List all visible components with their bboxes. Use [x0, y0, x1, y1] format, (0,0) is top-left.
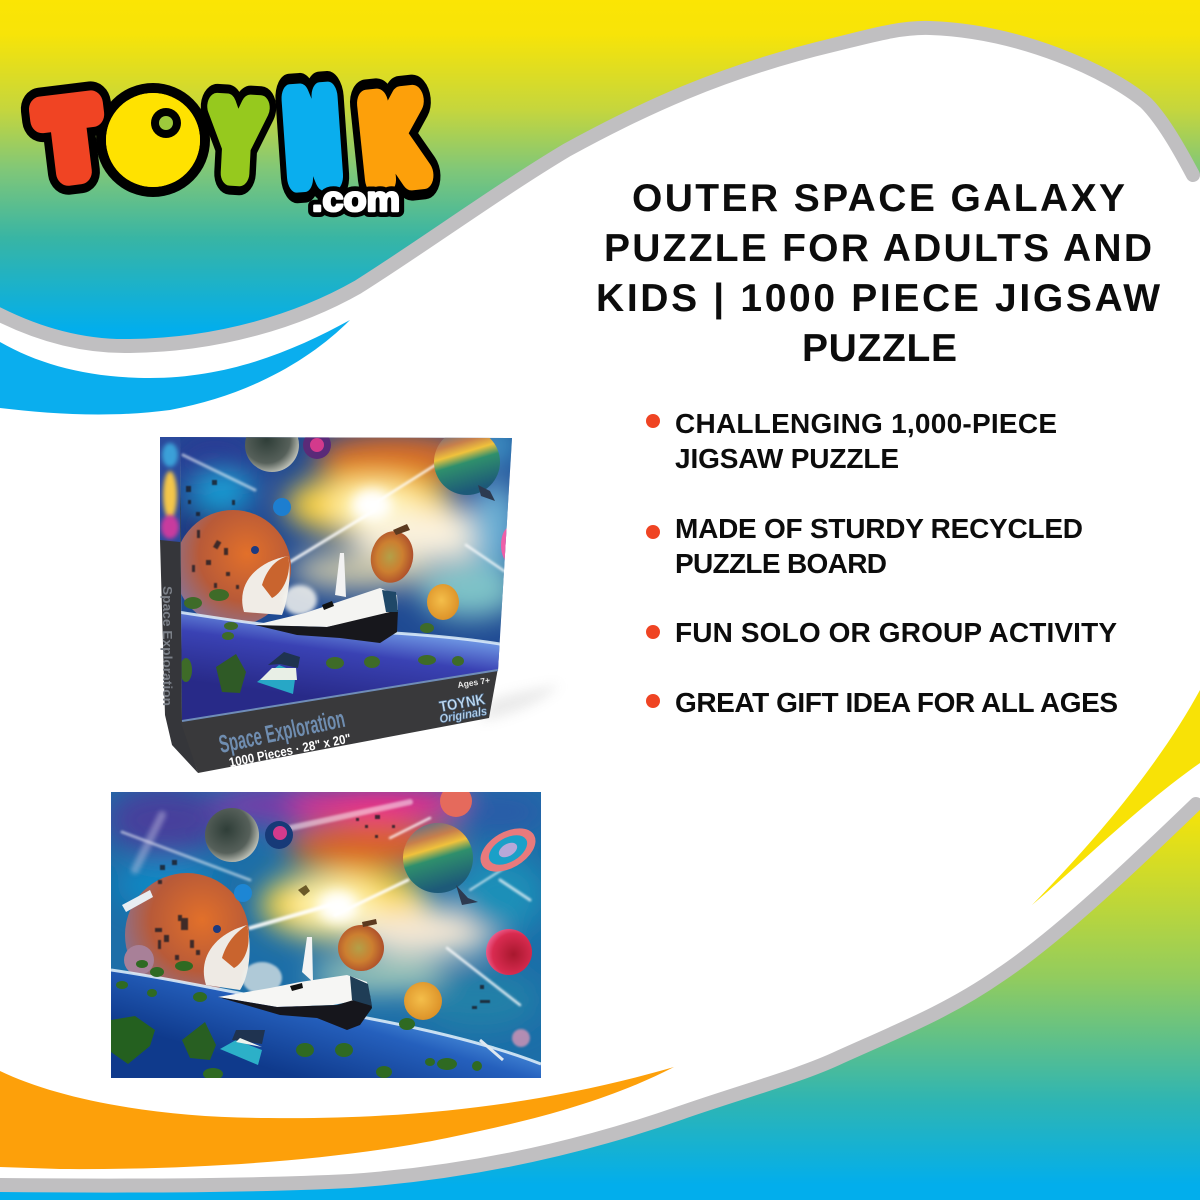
logo letter T: T: [37, 83, 103, 196]
logo letter O: [106, 93, 200, 191]
top grey swoosh band: [0, 28, 1193, 346]
bullet 1: CHALLENGING 1,000-PIECE: [675, 408, 1057, 439]
box brand: [436, 691, 488, 726]
top gradient background with swoosh: [0, 0, 1200, 346]
title: PUZZLE: [802, 327, 957, 370]
logo .com: .com: [312, 180, 400, 219]
puzzle earth: [111, 970, 541, 1078]
puzzle background: [111, 792, 541, 1078]
box spine: [160, 437, 198, 773]
logo: TOYNK.com: [37, 72, 426, 219]
box art: [180, 437, 512, 720]
bullet 2: [646, 513, 1083, 579]
bullet 4: GREAT GIFT IDEA FOR ALL AGES: [675, 687, 1118, 718]
puzzle space station: [480, 1040, 503, 1060]
light streaks: [122, 802, 530, 1005]
earth: [178, 612, 500, 730]
trapezoid debris: [257, 665, 296, 694]
streak lines: [183, 455, 510, 575]
title: [596, 177, 1160, 370]
box title: Space Exploration: [216, 705, 347, 759]
box blue rule: [182, 670, 498, 721]
logo letter Y: Y: [211, 85, 263, 195]
planets: [245, 437, 299, 472]
puzzle box: [160, 418, 560, 773]
box shadow: [480, 684, 560, 722]
logo outline layer: Y: [211, 85, 263, 195]
bullet 1: [646, 408, 1057, 474]
box caption: 1000 Pieces · 28" x 20": [228, 731, 352, 770]
logo outline layer: N: [284, 72, 340, 202]
bottom orange swoosh: [0, 1067, 674, 1169]
puzzle planets: [205, 808, 259, 862]
logo letter N: N: [284, 72, 340, 202]
puzzle debris: [220, 1040, 262, 1065]
title: KIDS | 1000 PIECE JIGSAW: [596, 277, 1160, 320]
puzzle image: [105, 785, 550, 1080]
logo .com: .com: [312, 180, 400, 219]
puzzle shuttle: [302, 937, 313, 982]
title: PUZZLE FOR ADULTS AND: [604, 227, 1152, 270]
logo letter O: O: [120, 95, 186, 191]
box age label: Ages 7+: [457, 675, 491, 690]
bottom gradient background: [0, 804, 1200, 1200]
bullet 2: MADE OF STURDY RECYCLED: [675, 513, 1083, 544]
asteroids: [180, 589, 464, 693]
asteroid specks: [186, 480, 239, 589]
puzzle asteroid specks: [155, 815, 490, 1009]
bullet 2: PUZZLE BOARD: [675, 548, 887, 579]
bullet 3: FUN SOLO OR GROUP ACTIVITY: [675, 617, 1117, 648]
logo letter K: K: [360, 76, 426, 203]
box lower label strip: [180, 668, 498, 773]
bullet list: [646, 408, 1118, 718]
box brand: Originals: [438, 704, 488, 726]
logo outline layer: T: [37, 83, 103, 196]
bullet 1: JIGSAW PUZZLE: [675, 443, 899, 474]
bottom grey swoosh band: [0, 804, 1196, 1186]
blue swoosh under top band: [0, 320, 350, 414]
title: OUTER SPACE GALAXY: [632, 177, 1125, 220]
logo outline layer: [37, 72, 426, 203]
logo outline layer: K: [360, 76, 426, 203]
box spine: Space Exploration: [160, 586, 175, 706]
puzzle asteroids: [111, 960, 482, 1080]
shuttle: [335, 553, 346, 597]
box brand: TOYNK: [438, 691, 486, 716]
right yellow swoosh: [1032, 690, 1200, 905]
